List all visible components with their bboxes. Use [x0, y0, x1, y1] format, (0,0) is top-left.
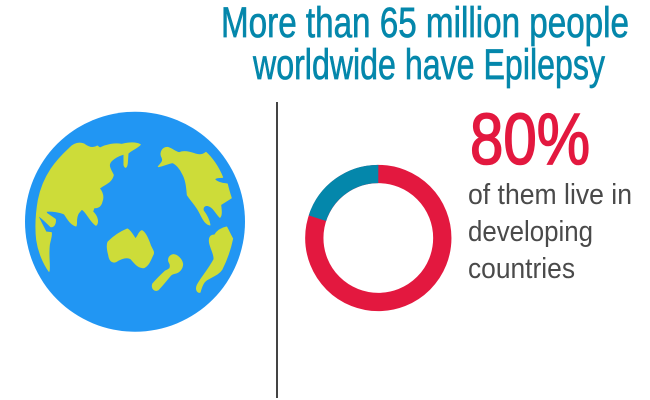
land: south america: [197, 227, 233, 292]
donut chart: 80 percent: [314, 174, 442, 302]
land: new zealand: [152, 255, 183, 290]
text block: description: developing: [468, 216, 593, 248]
divider: [276, 102, 278, 398]
icon: globe: [25, 112, 245, 332]
text block: description: of them live in: [468, 179, 632, 211]
text block: description: [468, 179, 632, 285]
land: australia: [107, 229, 153, 268]
land: north america: [158, 147, 231, 225]
text block: description: countries: [468, 253, 575, 285]
statistic: 80%: 80%: [470, 100, 590, 180]
title: [221, 0, 629, 89]
land: asia and europe: [36, 143, 140, 271]
